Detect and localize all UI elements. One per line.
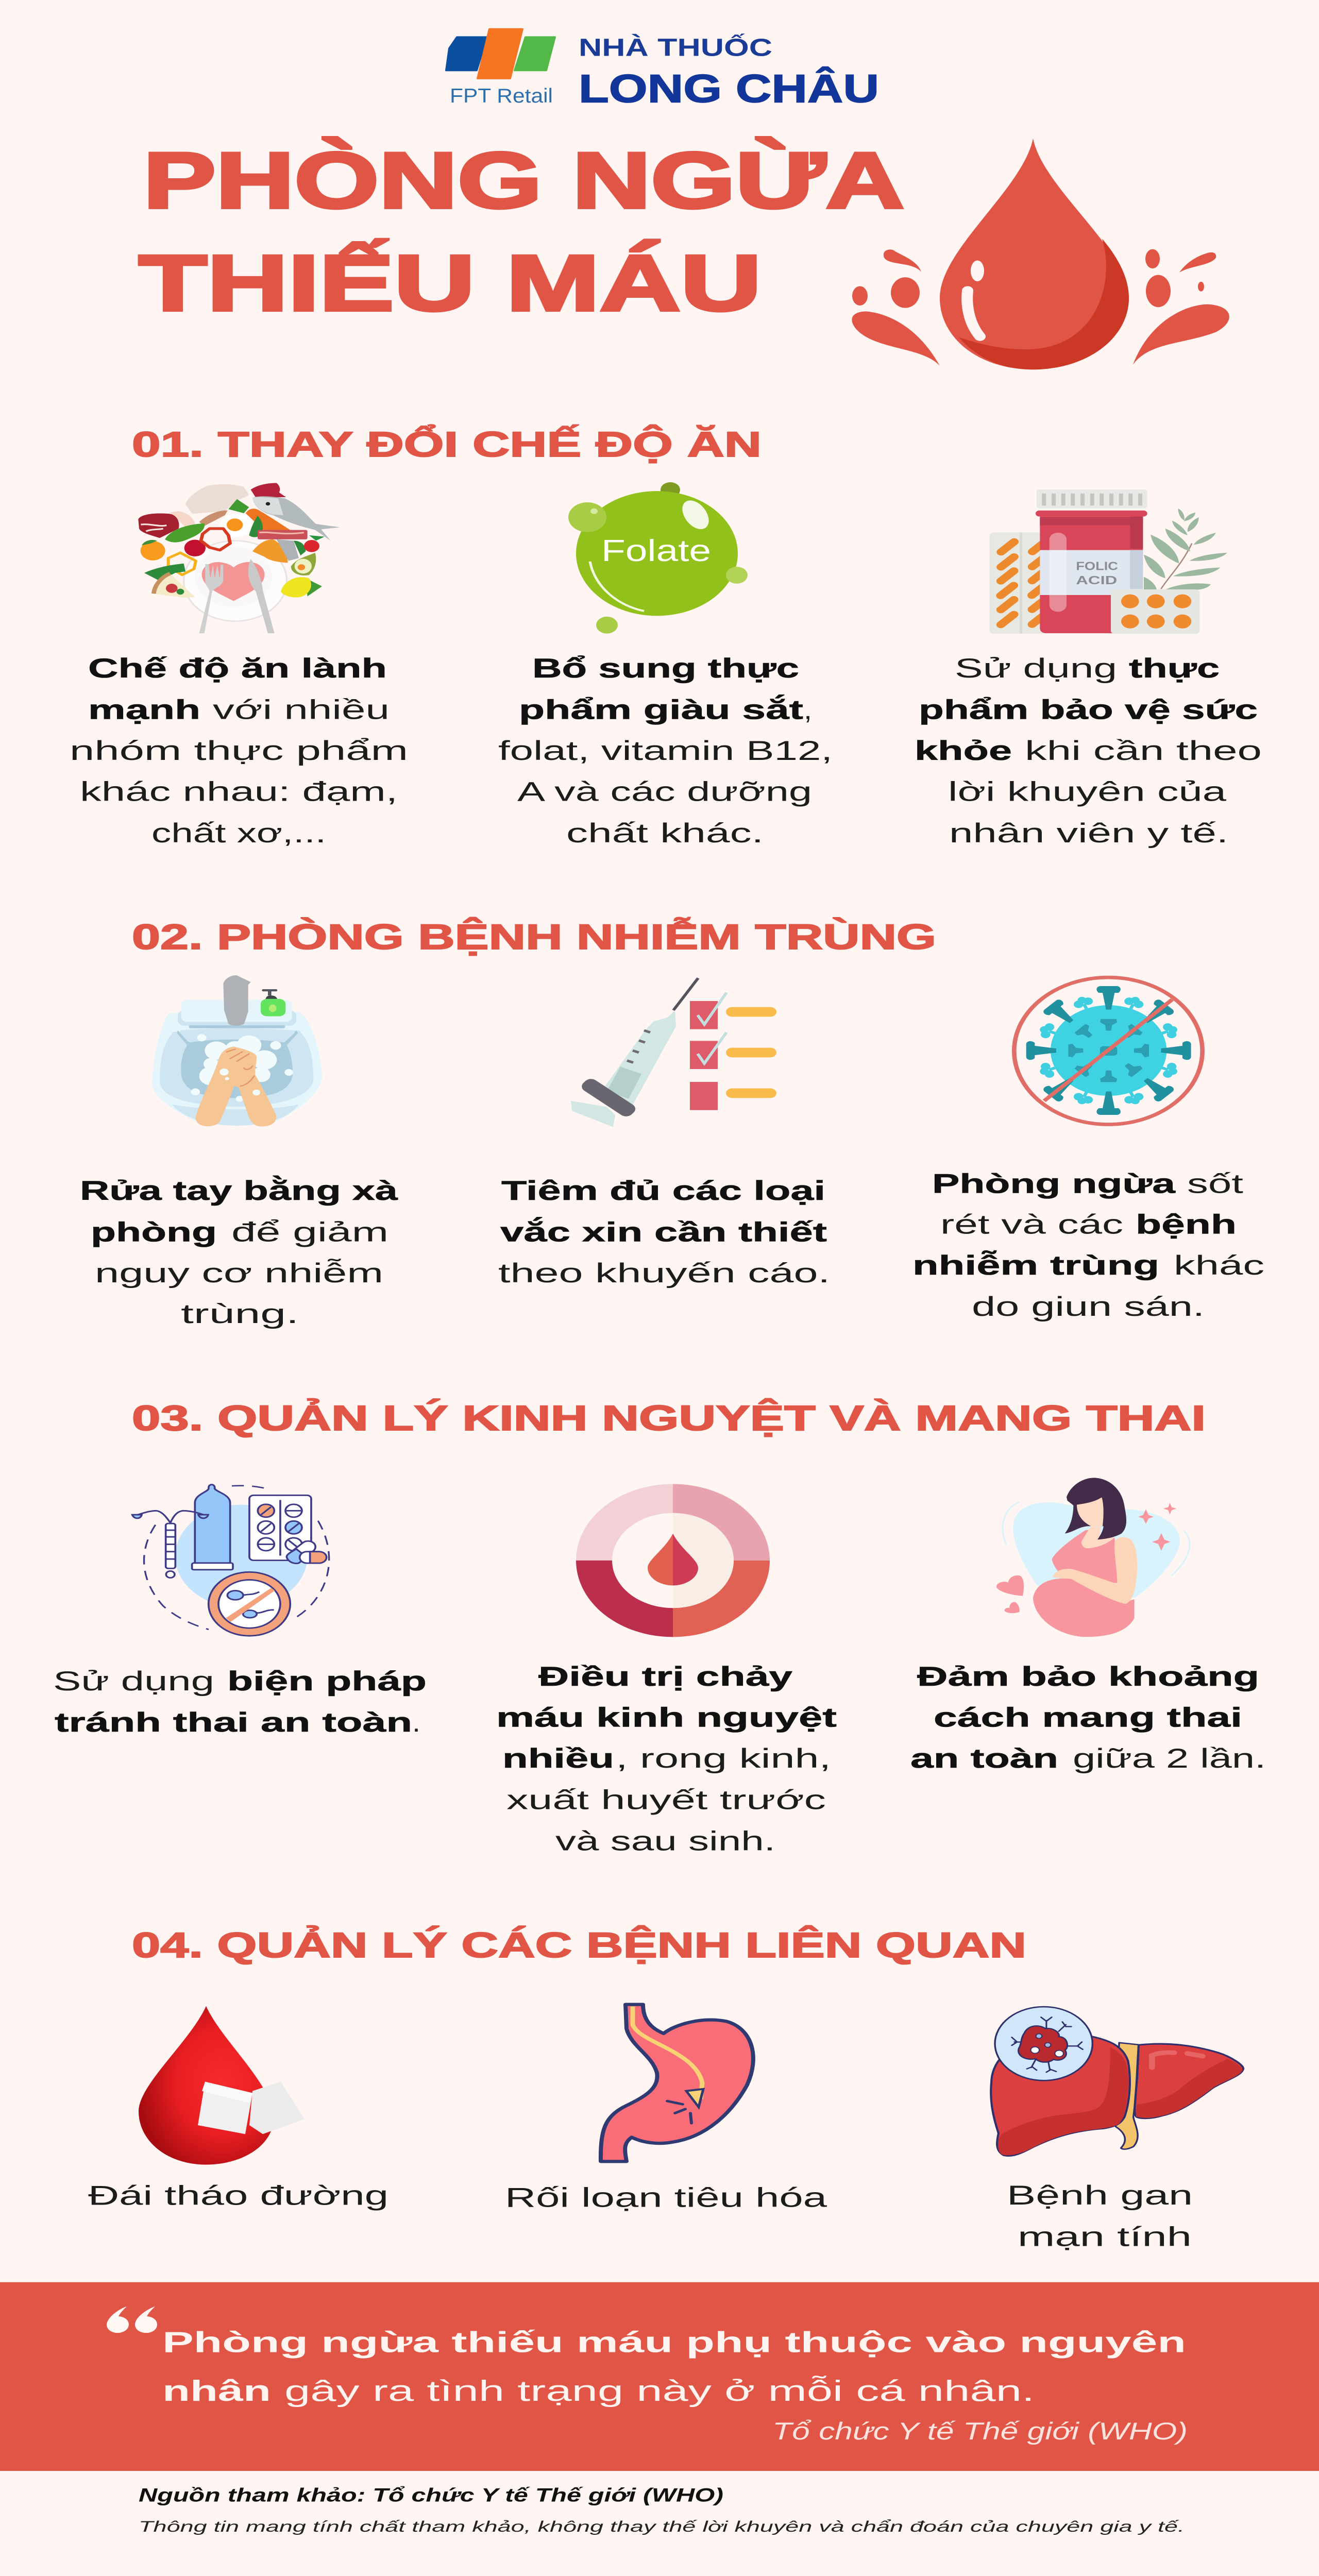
text: supplements: khi cần theo — [1025, 735, 1262, 766]
text: menstrual bleeding: , rong kinh, — [616, 1743, 831, 1774]
icon: folic acid bottle and pills — [990, 489, 1227, 634]
icon: pregnant woman — [996, 1478, 1190, 1637]
text: hand washing: Rửa tay bằng xà — [80, 1175, 398, 1206]
text: contraception: . — [412, 1707, 420, 1737]
logo: FPT Retail Nhà thuốc Long Châu: FPT Retail — [450, 84, 553, 107]
text: healthy diet: chất xơ,... — [151, 818, 326, 848]
text: malaria and parasites: sốt — [1187, 1168, 1243, 1199]
text: contraception: Sử dụng — [53, 1666, 214, 1697]
heading: section 03: 03. QUẢN LÝ KINH NGUYỆT VÀ MANG THAI — [132, 1398, 1206, 1438]
text: menstrual bleeding: xuất huyết trước — [506, 1785, 826, 1815]
text: hand washing: để giảm — [231, 1216, 388, 1247]
text: malaria and parasites: nhiễm trùng — [912, 1250, 1159, 1281]
title: PHÒNG NGỪA — [143, 137, 904, 225]
panel: WHO quote: gây ra tình trạng này ở mỗi cá nhân. — [284, 2375, 1035, 2407]
label: chronic liver disease: Bệnh gan — [1007, 2180, 1193, 2210]
text: pregnancy spacing: Đảm bảo khoảng — [917, 1661, 1259, 1691]
text: supplements: nhân viên y tế. — [949, 818, 1228, 848]
icon: contraception — [132, 1485, 329, 1636]
text: pregnancy spacing: an toàn — [910, 1743, 1058, 1774]
text: supplements — [915, 653, 1262, 848]
text: hand washing: phòng — [91, 1216, 217, 1247]
text: healthy diet — [70, 653, 408, 848]
text: malaria and parasites: rét và các — [940, 1209, 1123, 1240]
text: source and disclaimer: Nguồn tham khảo: Tổ chức Y tế Thế giới (WHO) — [139, 2484, 723, 2505]
text: iron-rich foods: Bổ sung thực — [532, 653, 799, 683]
icon: virus with prohibition sign — [1014, 977, 1203, 1125]
text: vaccination: vắc xin cần thiết — [500, 1216, 827, 1247]
icon: folic acid bottle and pills: ACID — [1076, 573, 1117, 587]
icon: stomach — [601, 2005, 753, 2161]
icon: syringe and checklist — [571, 978, 776, 1127]
text: hand washing: trùng. — [181, 1298, 299, 1329]
text: pregnancy spacing — [910, 1661, 1266, 1774]
text: vaccination — [498, 1175, 830, 1288]
text: supplements: khỏe — [915, 735, 1012, 766]
text: supplements: thực — [1129, 653, 1220, 683]
text: iron-rich foods: A và các dưỡng — [517, 776, 812, 807]
panel: WHO quote — [0, 2282, 1319, 2471]
icon: quotation mark — [107, 2307, 157, 2333]
text: iron-rich foods — [498, 653, 833, 848]
label: chronic liver disease: mạn tính — [1018, 2221, 1192, 2252]
text: contraception: biện pháp — [227, 1666, 427, 1697]
text: healthy diet: khác nhau: đạm, — [80, 776, 398, 807]
text: menstrual bleeding: và sau sinh. — [555, 1826, 775, 1856]
icon: donut chart with drop — [576, 1484, 770, 1637]
logo: FPT Retail Nhà thuốc Long Châu: NHÀ THUỐC — [579, 33, 772, 61]
text: source and disclaimer: Thông tin mang tính chất tham khảo, không thay thế lời khuyên và chẩn đoán của chuyên gia y tế. — [139, 2518, 1185, 2535]
label: diabetes: Đái tháo đường — [88, 2180, 388, 2211]
text: iron-rich foods: chất khác. — [566, 818, 764, 848]
title — [139, 137, 904, 327]
label: chronic liver disease — [1007, 2180, 1193, 2252]
text: healthy diet: Chế độ ăn lành — [88, 653, 387, 683]
text: iron-rich foods: , — [804, 694, 812, 725]
text: source and disclaimer — [139, 2484, 1185, 2535]
text: contraception — [53, 1666, 427, 1737]
text: menstrual bleeding: Điều trị chảy — [538, 1661, 792, 1691]
text: pregnancy spacing: giữa 2 lần. — [1073, 1743, 1266, 1774]
icon: folate — [568, 482, 748, 634]
heading: section 04: 04. QUẢN LÝ CÁC BỆNH LIÊN QUAN — [132, 1925, 1026, 1965]
logo: FPT Retail Nhà thuốc Long Châu — [446, 29, 879, 111]
heading: section 02: 02. PHÒNG BỆNH NHIỄM TRÙNG — [132, 917, 936, 957]
text: hand washing — [80, 1175, 398, 1329]
icon: folic acid bottle and pills: FOLIC — [1076, 560, 1118, 573]
text: pregnancy spacing: cách mang thai — [934, 1702, 1242, 1733]
text: malaria and parasites: Phòng ngừa — [932, 1168, 1176, 1199]
label: digestive disorder: Rối loạn tiêu hóa — [505, 2182, 827, 2213]
icon: folate: Folate — [601, 534, 711, 568]
text: healthy diet: mạnh — [88, 694, 200, 725]
text: iron-rich foods: folat, vitamin B12, — [498, 735, 833, 766]
text: supplements: lời khuyên của — [948, 776, 1226, 807]
icon: healthy food plate — [138, 483, 340, 633]
icon: blood drop with splashes — [852, 139, 1229, 369]
text: healthy diet: với nhiều — [213, 694, 390, 725]
text: hand washing: nguy cơ nhiễm — [95, 1258, 383, 1288]
title: THIẾU MÁU — [139, 239, 762, 327]
text: vaccination: Tiêm đủ các loại — [501, 1175, 825, 1206]
text: malaria and parasites: khác — [1174, 1250, 1264, 1281]
text: menstrual bleeding — [496, 1661, 837, 1856]
text: supplements: Sử dụng — [955, 653, 1117, 683]
icon: blood drop with sugar cubes — [139, 2006, 305, 2165]
text: menstrual bleeding: máu kinh nguyệt — [496, 1702, 837, 1733]
text: vaccination: theo khuyến cáo. — [498, 1258, 830, 1288]
panel: WHO quote: Tổ chức Y tế Thế giới (WHO) — [772, 2418, 1188, 2445]
heading: section 01: 01. THAY ĐỔI CHẾ ĐỘ ĂN — [132, 424, 762, 464]
text: contraception: tránh thai an toàn — [55, 1707, 412, 1737]
text: healthy diet: nhóm thực phẩm — [70, 735, 408, 766]
panel: WHO quote: Phòng ngừa thiếu máu phụ thuộc vào nguyên — [162, 2326, 1186, 2359]
text: menstrual bleeding: nhiều — [502, 1743, 614, 1774]
text: iron-rich foods: phẩm giàu sắt — [519, 694, 803, 725]
text: malaria and parasites: do giun sán. — [972, 1291, 1205, 1321]
panel: WHO quote: nhân — [162, 2375, 271, 2407]
icon: hand washing — [152, 975, 322, 1126]
icon: liver with tumor — [991, 2007, 1243, 2156]
text: malaria and parasites: bệnh — [1136, 1209, 1237, 1240]
text: supplements: phẩm bảo vệ sức — [919, 694, 1258, 725]
logo: FPT Retail Nhà thuốc Long Châu: LONG CHÂU — [579, 66, 879, 111]
text: malaria and parasites — [912, 1168, 1264, 1321]
